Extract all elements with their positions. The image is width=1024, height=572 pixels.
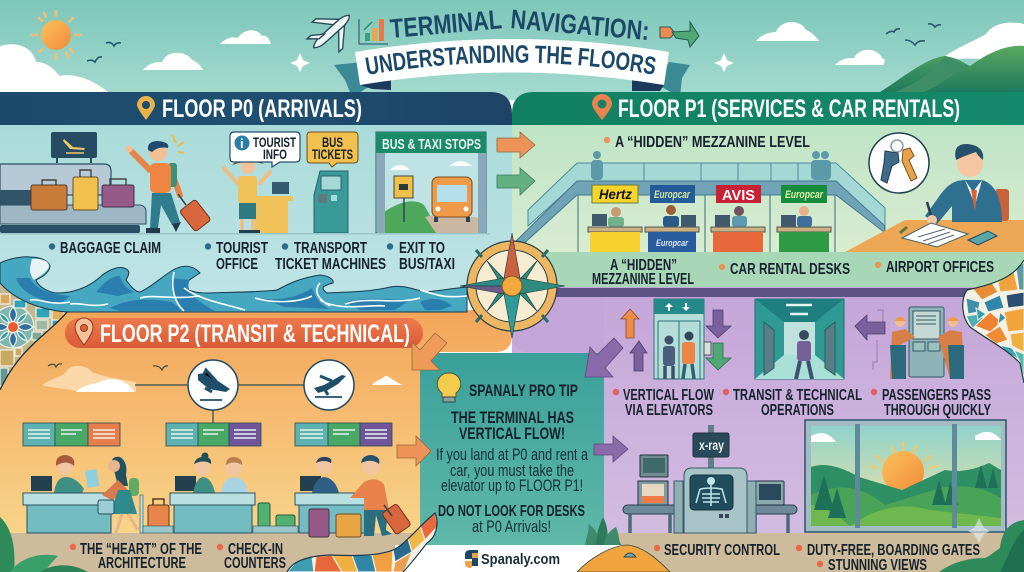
arrow: orange right <box>397 436 431 466</box>
plants bottom left <box>0 517 88 572</box>
rental signs: Europcar <box>785 189 824 201</box>
sky clouds right <box>756 22 1024 70</box>
icon: bar chart <box>359 19 388 44</box>
caption: transit and technical <box>723 387 862 419</box>
caption: hidden mezzanine band <box>592 257 694 288</box>
tip warning <box>438 503 585 536</box>
orange mound <box>577 545 670 572</box>
caption: security control: SECURITY CONTROL <box>664 542 780 559</box>
arrow: orange down-left <box>412 333 447 370</box>
foam and shadows <box>16 259 467 311</box>
caption: exit to bus/taxi: EXIT TO <box>399 240 445 257</box>
security x-ray illustration: x-ray <box>699 437 724 453</box>
traveller with suitcase <box>126 135 211 233</box>
icon: keys <box>869 133 929 193</box>
baggage claim illustration <box>0 132 146 233</box>
title line 2: UNDERSTANDING THE FLOORS <box>365 45 656 74</box>
caption: tourist office <box>205 240 268 273</box>
caption: car rental desks: CAR RENTAL DESKS <box>730 261 850 278</box>
technicians illustration <box>855 307 964 379</box>
caption: transport ticket machines <box>275 240 386 273</box>
connector lines <box>135 385 304 423</box>
caption: transit and technical: TRANSIT & TECHNICAL <box>733 387 862 404</box>
plants bottom right <box>939 520 1024 572</box>
panel: floor P1 <box>512 92 1024 288</box>
caption: check-in counters: CHECK-IN <box>228 541 283 558</box>
icon: pin gold <box>137 96 155 120</box>
caption: check-in counters: COUNTERS <box>224 555 286 572</box>
icon: sparkle <box>714 53 734 72</box>
sky clouds left <box>0 30 271 92</box>
check-in desk 3 with agent and passenger <box>295 455 411 537</box>
check-in desk 1 with agent and passenger <box>23 455 139 533</box>
icon: title arrows <box>660 22 699 47</box>
rental signs: Hertz <box>599 186 632 202</box>
caption: hidden mezzanine band: A “HIDDEN” <box>610 257 677 274</box>
rental signs: AVIS <box>722 187 755 204</box>
mezzanine illustration <box>515 151 885 252</box>
rental desks and agents <box>588 205 831 252</box>
icon: departures circle <box>304 360 354 410</box>
security x-ray illustration <box>623 425 797 533</box>
mosaic left <box>0 284 68 390</box>
caption: exit to bus/taxi: BUS/TAXI <box>399 256 455 273</box>
tourist office illustration <box>224 156 293 233</box>
caption: check-in counters <box>217 541 286 572</box>
tip warning: DO NOT LOOK FOR DESKS <box>438 503 585 520</box>
caption band <box>512 252 1024 287</box>
waves <box>0 257 467 312</box>
luggage between desks <box>140 495 298 533</box>
logo text: Spanaly.com <box>481 551 560 568</box>
rental signs <box>592 185 827 204</box>
panel: floor P2 left <box>0 310 512 572</box>
departure boards <box>23 423 392 446</box>
tip body <box>436 445 588 495</box>
icon: pin P2 <box>75 318 93 345</box>
caption: transit and technical: OPERATIONS <box>761 402 834 419</box>
bus and taxi stop: BUS & TAXI STOPS <box>382 136 481 153</box>
check-in desk 2 with agents <box>170 452 255 533</box>
icon: sparkle <box>290 53 310 72</box>
ticket machine with bubble: BUS <box>322 134 343 150</box>
caption: transport ticket machines: TRANSPORT <box>294 240 367 257</box>
title line 1: NAVIGATION: <box>509 4 651 46</box>
bus and taxi stop <box>376 132 486 233</box>
tip heading: SPANALY PRO TIP <box>469 381 578 400</box>
caption: heart of the architecture <box>70 541 202 572</box>
tip body: car, you must take the <box>450 461 574 480</box>
tip headline <box>451 408 574 443</box>
birds right <box>886 24 941 45</box>
caption: heart of the architecture: THE “HEART” OF THE <box>80 541 202 558</box>
window with mountain view <box>805 420 1006 543</box>
caption: vertical flow <box>613 387 715 419</box>
background: sky <box>0 0 1024 100</box>
heading band P1 <box>512 92 1024 125</box>
caption: hidden mezzanine band: MEZZANINE LEVEL <box>592 271 694 288</box>
icon: airplane <box>300 1 363 63</box>
caption: baggage claim <box>49 240 161 257</box>
white logo panel <box>395 545 627 572</box>
arrow: purple down-left <box>585 338 623 377</box>
caption: heart of the architecture: ARCHITECTURE <box>98 555 186 572</box>
logo icon <box>465 550 478 568</box>
panel: purple top-left corner overlap <box>512 297 604 352</box>
office worker at desk <box>845 144 1024 252</box>
speech bubble: tourist info: TOURIST <box>253 134 296 150</box>
caption: exit to bus/taxi <box>387 240 455 273</box>
panel: pro tip <box>420 353 604 545</box>
panel: floor P0 <box>0 92 512 295</box>
ground band right <box>604 533 1024 572</box>
caption: hidden mezzanine top: A “HIDDEN” MEZZANINE LEVEL <box>615 134 810 151</box>
mountains <box>880 46 1024 92</box>
speech bubble: tourist info <box>230 132 300 167</box>
arrows P0 to P1 <box>497 132 535 195</box>
caption: tourist office: OFFICE <box>216 256 258 273</box>
icon: light bulb <box>437 373 461 402</box>
ticket machine with bubble <box>307 132 358 233</box>
caption: passengers pass <box>871 387 991 419</box>
caption: vertical flow: VERTICAL FLOW <box>623 387 715 404</box>
mosaic right <box>962 260 1024 384</box>
caption: baggage claim: BAGGAGE CLAIM <box>60 240 161 257</box>
panel: purple floor P2 right <box>512 287 1024 537</box>
speech bubble: tourist info: i <box>240 136 244 151</box>
caption: tourist office: TOURIST <box>216 240 268 257</box>
ticket machine with bubble: TICKETS <box>312 146 353 162</box>
floor line <box>0 233 490 234</box>
arrow: purple right <box>594 436 628 462</box>
ribbon banner <box>334 39 690 92</box>
icon: pin orange <box>592 94 612 120</box>
heading P2: FLOOR P2 (TRANSIT & TECHNICAL) <box>100 320 410 348</box>
ground band <box>0 533 420 572</box>
speech bubble: tourist info: INFO <box>263 146 287 162</box>
caption: transport ticket machines: TICKET MACHINES <box>275 256 386 273</box>
elevator illustration <box>621 299 731 379</box>
tip headline: THE TERMINAL HAS <box>451 408 574 427</box>
tip body: If you land at P0 and rent a <box>436 445 588 464</box>
tip headline: VERTICAL FLOW! <box>459 424 565 443</box>
title line 1: TERMINAL <box>389 4 503 44</box>
mosaic bottom <box>285 510 440 572</box>
caption: vertical flow: VIA ELEVATORS <box>625 402 713 419</box>
caption: security control <box>654 542 780 559</box>
tip body: elevator up to FLOOR P1! <box>441 476 583 495</box>
caption: duty-free and views <box>796 542 980 572</box>
tip warning: at P0 Arrivals! <box>472 517 551 536</box>
birds left <box>87 42 121 62</box>
title line 1 <box>389 4 651 46</box>
plant by tip panel <box>585 517 622 545</box>
caption: car rental desks <box>719 261 850 278</box>
cloud and birds <box>42 364 403 392</box>
rental desks and agents: Europcar <box>656 238 688 248</box>
heading P0: FLOOR P0 (ARRIVALS) <box>162 95 362 123</box>
heading pill P2 <box>65 318 423 348</box>
rental signs: Europcar <box>654 189 691 201</box>
corridor illustration <box>755 299 844 379</box>
icon: arrivals circle <box>188 360 238 410</box>
icon: compass <box>460 233 565 338</box>
heading band P0 <box>0 92 512 125</box>
icon: sun <box>32 11 80 59</box>
